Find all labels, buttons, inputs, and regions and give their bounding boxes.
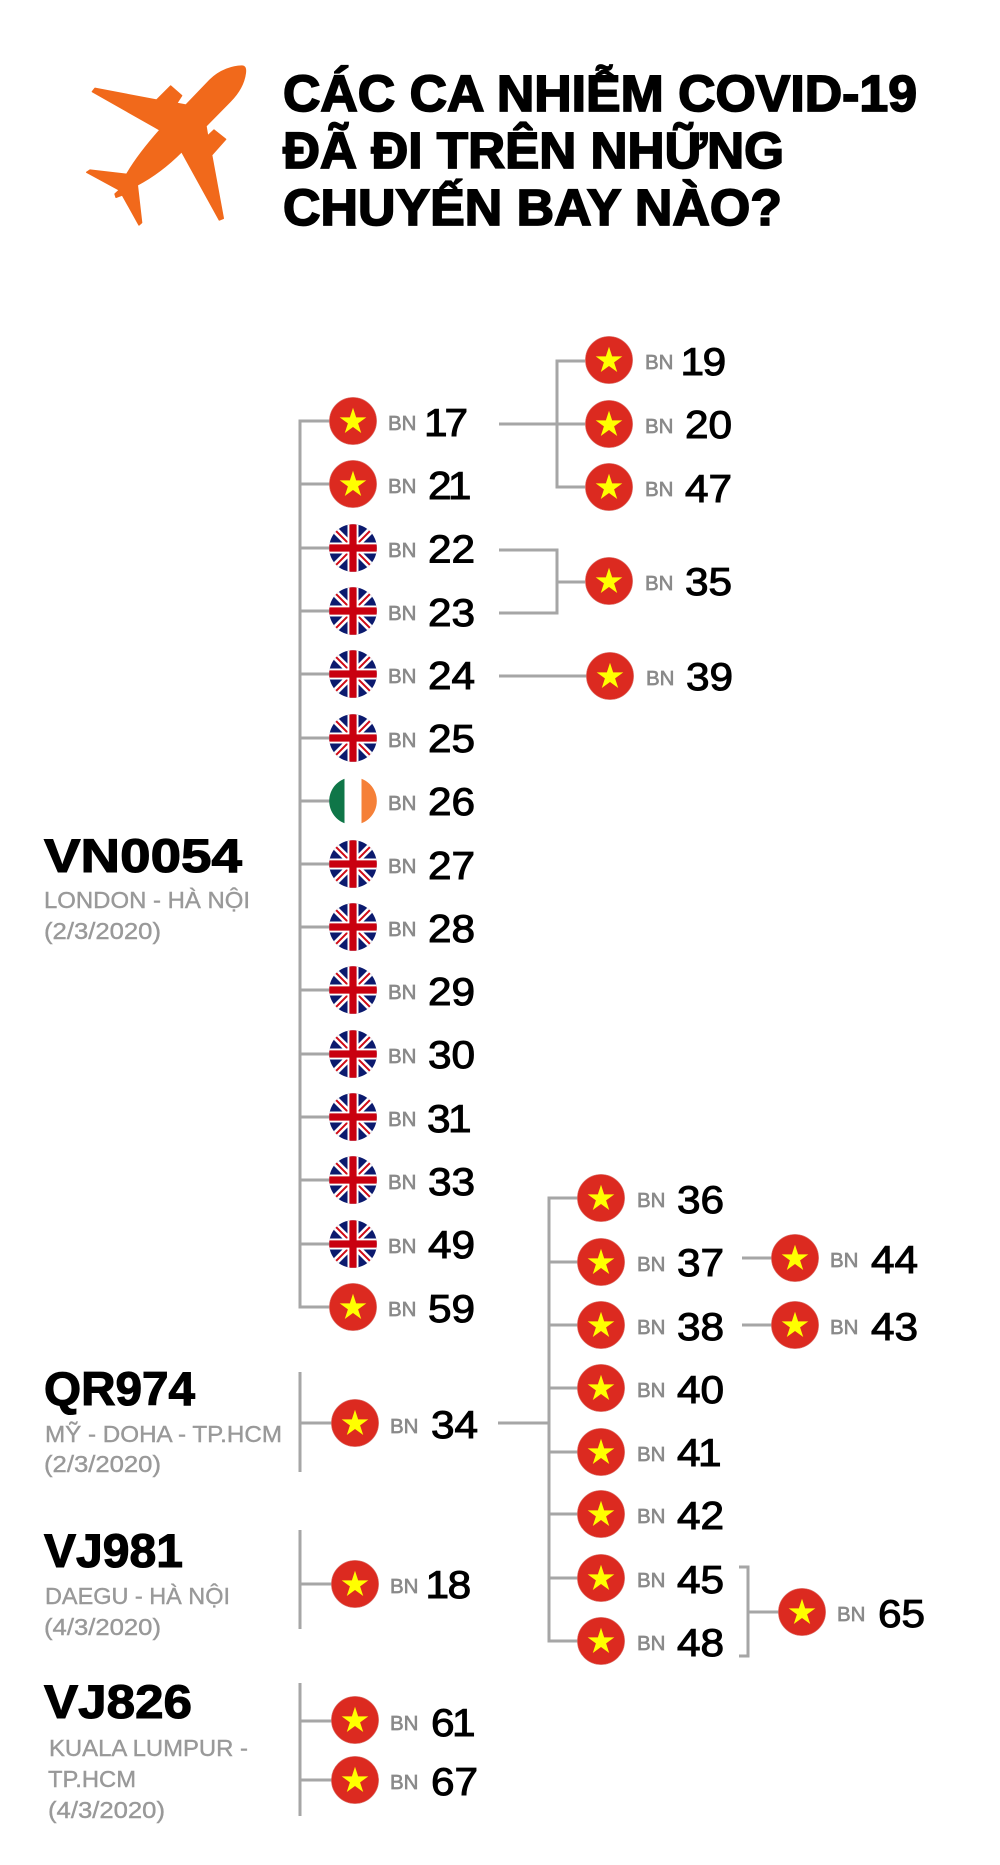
connector: VJ826 (300, 1683, 332, 1816)
patient BN 35: BN (645, 572, 673, 595)
patient BN 20: BN (645, 415, 673, 438)
patient BN 29: BN (388, 981, 416, 1004)
patient BN 34: 34 (431, 1403, 478, 1447)
patient BN 23: 23 (428, 591, 475, 635)
patient BN 33: BN (388, 1171, 416, 1194)
patient BN 34: BN (390, 1415, 418, 1438)
patient BN 36: 36 (677, 1178, 724, 1222)
patient BN 40: 40 (677, 1368, 724, 1412)
patient BN 38 (577, 1301, 724, 1349)
patient BN 61: BN (390, 1712, 418, 1735)
patient BN 65: 65 (878, 1592, 925, 1636)
flight: VJ981: VJ981 (44, 1524, 183, 1577)
patient BN 40 (577, 1364, 724, 1412)
patient BN 39: BN (646, 667, 674, 690)
patient BN 67: BN (390, 1771, 418, 1794)
patient BN 35: 35 (685, 560, 732, 604)
connector: QR974 (300, 1372, 332, 1472)
patient BN 19: 19 (680, 340, 726, 384)
patient BN 25: 25 (428, 717, 475, 761)
patient BN 17: 17 (424, 401, 468, 445)
patient BN 33: 33 (428, 1160, 475, 1204)
patient BN 21 (329, 460, 471, 508)
patient BN 23: BN (388, 602, 416, 625)
flight: VN0054: LONDON - HÀ NỘI (44, 886, 250, 913)
patient BN 43: BN (830, 1316, 858, 1339)
patient BN 28: 28 (428, 907, 475, 951)
icon: orange airplane (87, 66, 246, 225)
flight: VN0054 (44, 829, 250, 944)
patient BN 37: 37 (677, 1241, 724, 1285)
patient BN 31: BN (388, 1108, 416, 1131)
patient BN 48: BN (637, 1632, 665, 1655)
patient BN 48 (577, 1617, 724, 1665)
patient BN 59 (329, 1283, 475, 1331)
patient BN 26 (329, 777, 475, 825)
flight: QR974: (2/3/2020) (44, 1451, 161, 1477)
connector: VJ981 (300, 1530, 332, 1629)
patient BN 41: BN (637, 1443, 665, 1466)
patient BN 29 (329, 966, 475, 1014)
patient BN 39: 39 (686, 655, 733, 699)
patient BN 59: BN (388, 1298, 416, 1321)
patient BN 65: BN (837, 1603, 865, 1626)
patient BN 17: BN (388, 412, 416, 435)
patient BN 41: 41 (677, 1431, 722, 1475)
patient BN 43 (771, 1301, 918, 1349)
patient BN 17 (329, 397, 468, 445)
patient BN 61 (331, 1696, 476, 1745)
patient BN 49: 49 (428, 1223, 475, 1267)
patient BN 31 (329, 1093, 472, 1141)
patient BN 37: BN (637, 1253, 665, 1276)
title: CÁC CA NHIỄM COVID-19 (283, 64, 917, 122)
patient BN 29: 29 (428, 970, 475, 1014)
patient BN 27 (329, 840, 475, 888)
flight: QR974: QR974 (44, 1362, 195, 1415)
title: ĐÃ ĐI TRÊN NHỮNG (283, 121, 784, 179)
patient BN 33 (329, 1156, 475, 1204)
connector: BN 34 tree (498, 1198, 578, 1641)
patient BN 45: 45 (677, 1558, 724, 1602)
patient BN 35 (585, 557, 732, 605)
patient BN 59: 59 (428, 1287, 475, 1331)
patient BN 20 (585, 400, 732, 448)
patient BN 21: 21 (428, 464, 471, 508)
patient BN 24 (329, 650, 475, 698)
patient BN 28 (329, 903, 475, 951)
connector: BN 17 to 19, 20, 47 (499, 361, 585, 487)
patient BN 45 (577, 1554, 724, 1602)
patient BN 44 (771, 1234, 918, 1282)
patient BN 47: 47 (685, 467, 732, 511)
patient BN 41 (577, 1428, 722, 1476)
patient BN 23 (329, 587, 475, 635)
patient BN 27: BN (388, 855, 416, 878)
patient BN 65 (778, 1588, 925, 1636)
patient BN 38: BN (637, 1316, 665, 1339)
patient BN 34 (331, 1399, 478, 1447)
patient BN 42: BN (637, 1505, 665, 1528)
patient BN 38: 38 (677, 1305, 724, 1349)
connector: VN0054 tree (300, 421, 330, 1307)
flight: VJ826 (44, 1675, 248, 1823)
patient BN 18 (331, 1560, 471, 1608)
patient BN 30 (329, 1030, 475, 1078)
patient BN 24: 24 (428, 654, 475, 698)
patient BN 22: 22 (428, 527, 475, 571)
flight: QR974 (44, 1362, 282, 1477)
flight: QR974: MỸ - DOHA - TP.HCM (45, 1421, 282, 1447)
patient BN 48: 48 (677, 1621, 724, 1665)
patient BN 44: 44 (871, 1238, 918, 1282)
patient BN 67 (331, 1756, 478, 1804)
flight: VN0054: VN0054 (44, 829, 242, 882)
patient BN 20: 20 (685, 403, 732, 447)
connector: BN 37 to 44 (742, 1256, 772, 1260)
patient BN 49 (329, 1220, 475, 1268)
patient BN 42: 42 (677, 1494, 724, 1538)
patient BN 67: 67 (431, 1760, 478, 1804)
patient BN 26: BN (388, 792, 416, 815)
patient BN 25 (329, 714, 475, 762)
patient BN 45: BN (637, 1569, 665, 1592)
patient BN 42 (577, 1490, 724, 1538)
patient BN 18: BN (390, 1575, 418, 1598)
patient BN 36: BN (637, 1189, 665, 1212)
patient BN 28: BN (388, 918, 416, 941)
connector: BN 22, 23 to 35 (499, 550, 585, 613)
patient BN 25: BN (388, 729, 416, 752)
patient BN 36 (577, 1174, 724, 1222)
patient BN 47: BN (645, 478, 673, 501)
flight: VN0054: (2/3/2020) (44, 918, 161, 944)
patient BN 21: BN (388, 475, 416, 498)
patient BN 19 (585, 336, 726, 384)
patient BN 31: 31 (427, 1097, 472, 1141)
patient BN 40: BN (637, 1379, 665, 1402)
flight: VJ981 (44, 1524, 230, 1640)
title (283, 64, 917, 236)
patient BN 22: BN (388, 539, 416, 562)
patient BN 44: BN (830, 1249, 858, 1272)
patient BN 47 (585, 463, 732, 511)
patient BN 30: BN (388, 1045, 416, 1068)
patient BN 30: 30 (428, 1033, 475, 1077)
patient BN 19: BN (645, 351, 673, 374)
connector: BN 45, 48 to 65 (739, 1567, 780, 1656)
patient BN 39 (586, 652, 733, 700)
patient BN 24: BN (388, 665, 416, 688)
patient BN 22 (329, 524, 475, 572)
connector: BN 24 to 39 (499, 674, 587, 678)
flight: VJ826: (4/3/2020) (48, 1797, 165, 1823)
flight: VJ826: KUALA LUMPUR - (49, 1735, 248, 1761)
patient BN 37 (577, 1238, 724, 1286)
flight: VJ981: (4/3/2020) (44, 1614, 161, 1640)
patient BN 27: 27 (428, 844, 475, 888)
patient BN 18: 18 (426, 1563, 471, 1607)
patient BN 61: 61 (431, 1701, 476, 1745)
title: CHUYẾN BAY NÀO? (283, 178, 782, 236)
flight: VJ826: VJ826 (44, 1675, 192, 1728)
flight: VJ826: TP.HCM (48, 1766, 136, 1792)
patient BN 26: 26 (428, 780, 475, 824)
patient BN 43: 43 (871, 1305, 918, 1349)
connector: BN 38 to 43 (742, 1324, 772, 1326)
flight: VJ981: DAEGU - HÀ NỘI (45, 1582, 230, 1609)
patient BN 49: BN (388, 1235, 416, 1258)
